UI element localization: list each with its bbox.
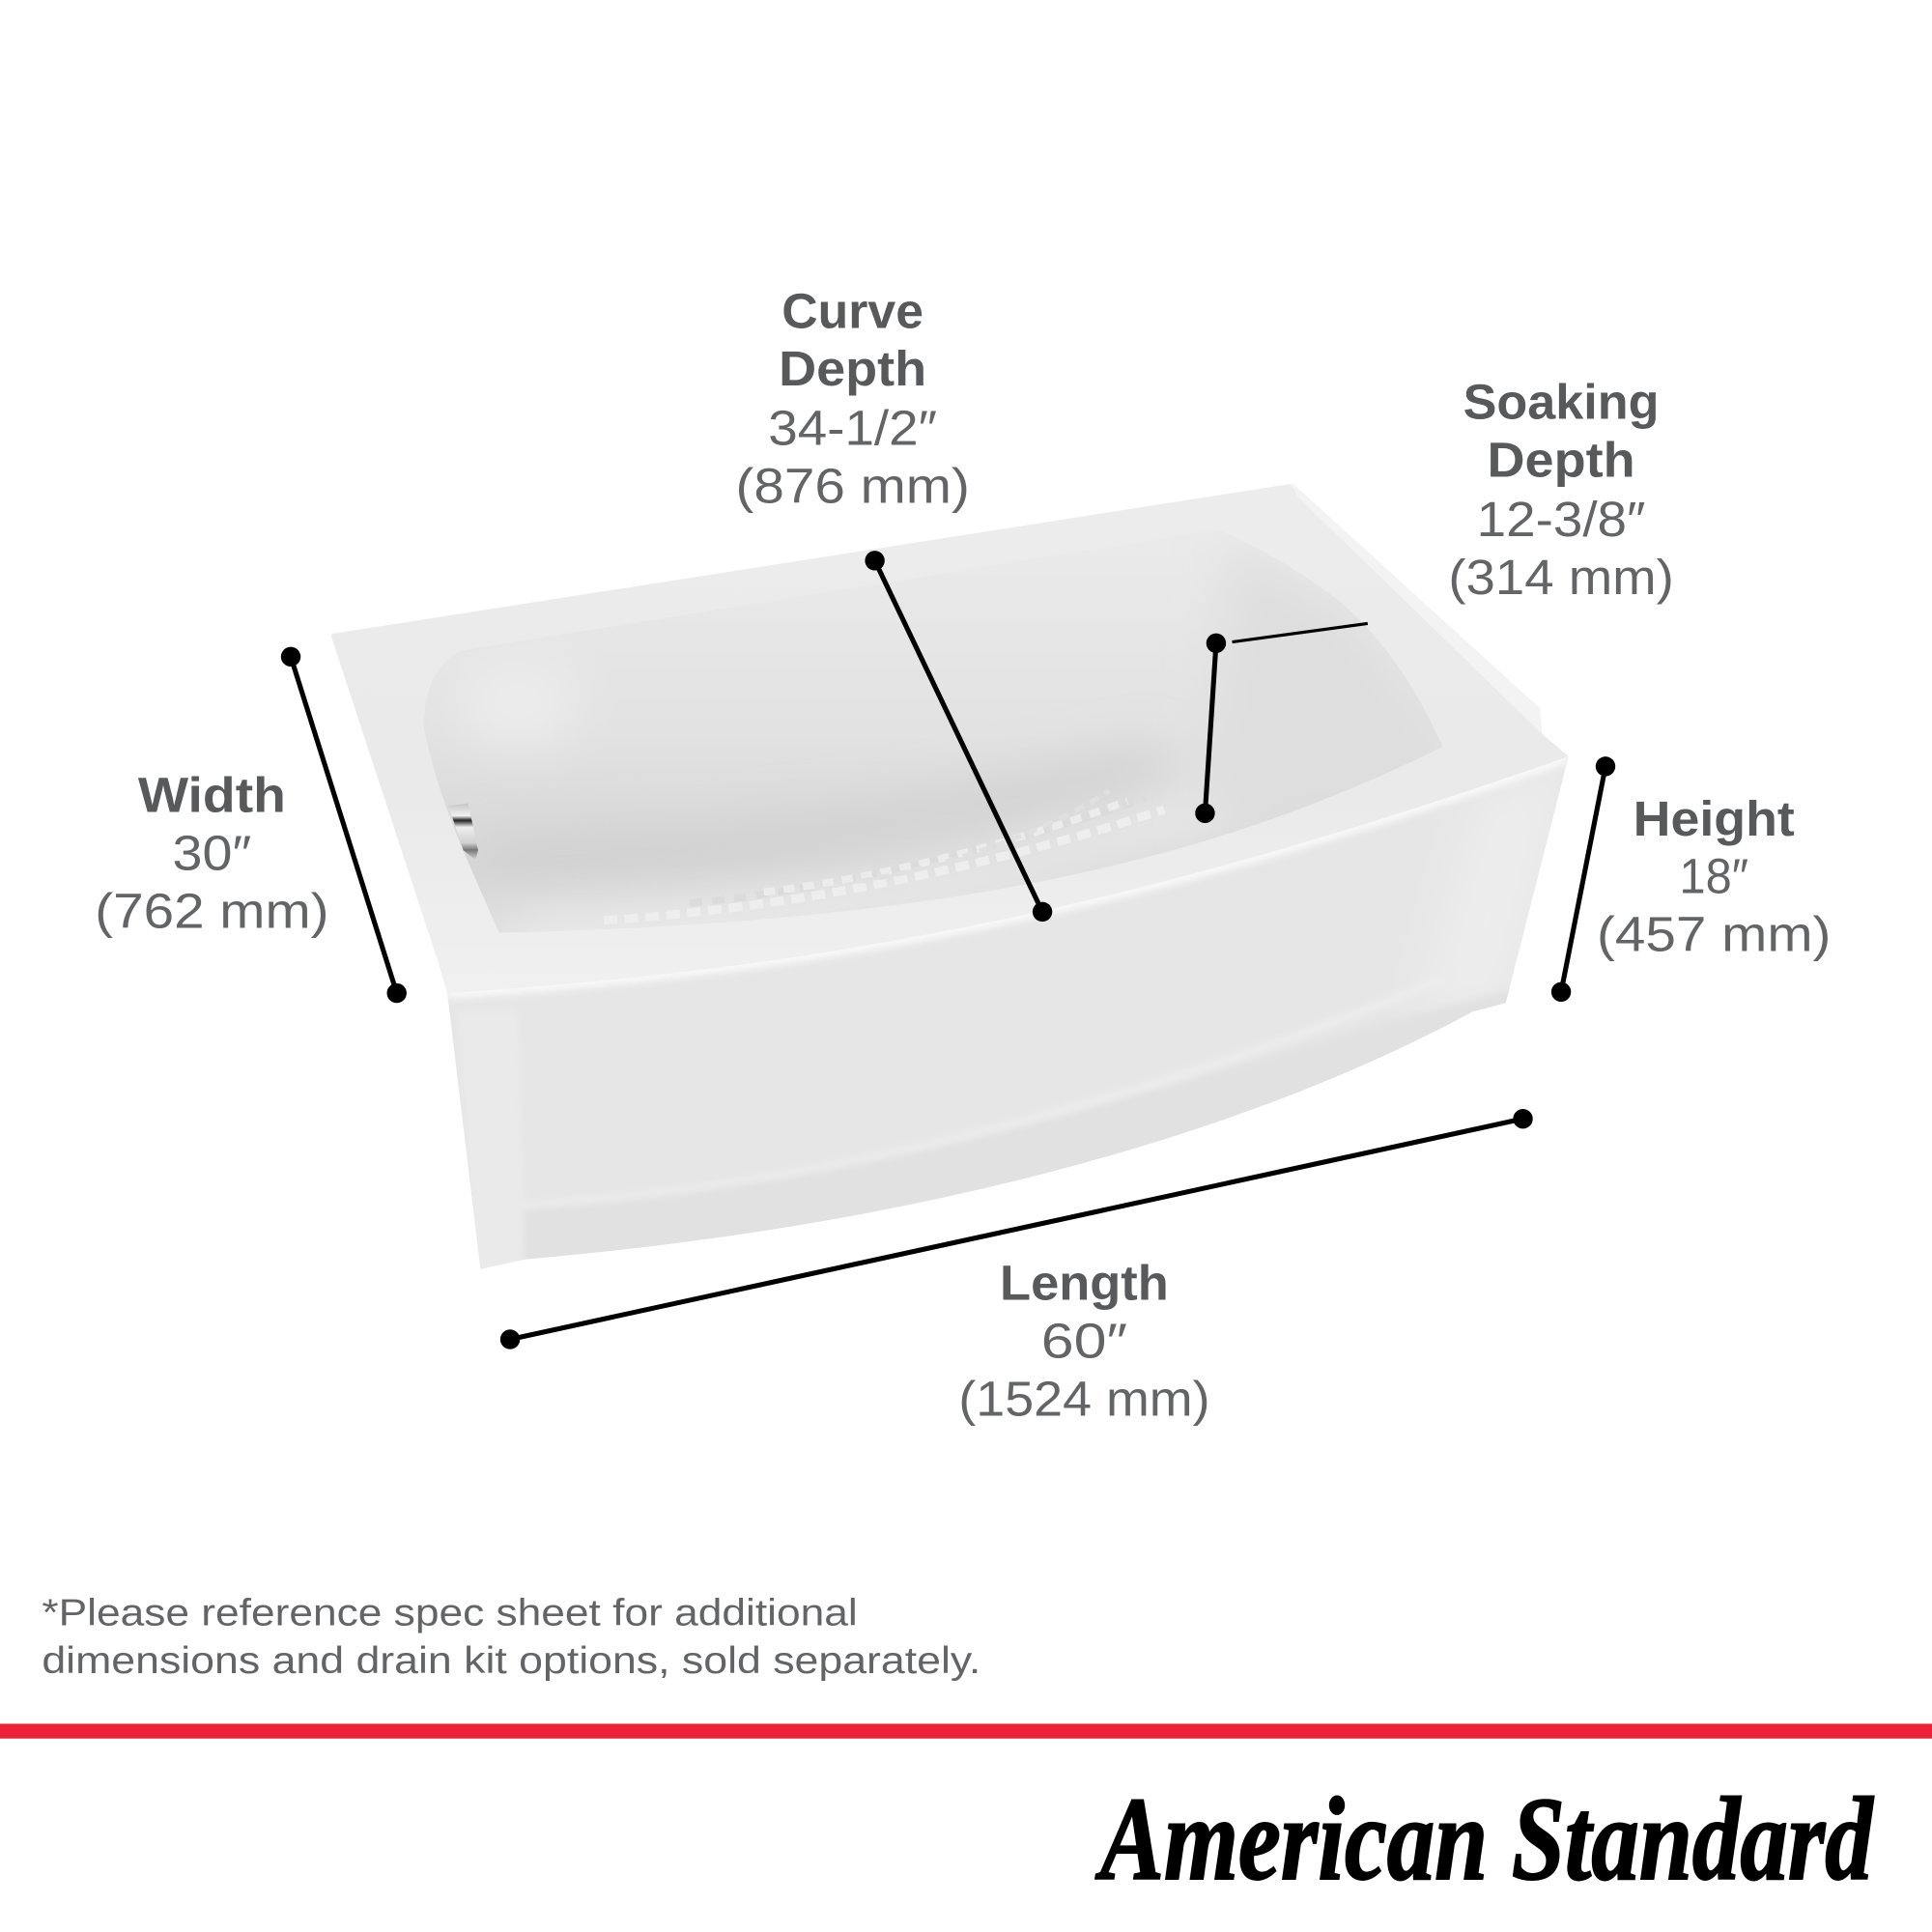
bath mat texture	[604, 791, 1164, 921]
dimension line: soaking depth	[1195, 623, 1368, 823]
label: soaking depth: Depth	[1488, 433, 1635, 488]
label: curve depth	[735, 283, 970, 513]
label: soaking depth	[1448, 375, 1674, 605]
label: soaking depth: 12-3/8″	[1477, 492, 1645, 547]
dimension line: width	[281, 647, 407, 1003]
label: length	[958, 1256, 1210, 1427]
label: length: (1524 mm)	[958, 1372, 1210, 1427]
footnote: *Please reference spec sheet for additional	[42, 1592, 858, 1634]
illustration: white curved bathtub	[331, 484, 1577, 1293]
label: height: Height	[1634, 791, 1795, 846]
red divider bar	[0, 1723, 1932, 1739]
basin interior	[424, 562, 1443, 933]
label: curve depth: (876 mm)	[735, 458, 970, 513]
dimension line: curve depth	[865, 551, 1052, 922]
dimension line: height	[1551, 756, 1615, 1002]
label: width: Width	[138, 768, 286, 823]
dimension line: length	[500, 1109, 1533, 1350]
label: height: (457 mm)	[1597, 907, 1831, 962]
overflow drain	[448, 804, 478, 860]
label: curve depth: Depth	[779, 341, 926, 396]
label: length: 60″	[1041, 1314, 1127, 1369]
label: height: 18″	[1680, 849, 1748, 904]
label: width	[95, 768, 329, 938]
label: curve depth: Curve	[781, 283, 923, 338]
rim top surface	[331, 484, 1569, 993]
label: height	[1597, 791, 1831, 962]
front apron panel	[438, 739, 1577, 1293]
label: width: 30″	[173, 826, 251, 881]
footnote	[42, 1592, 980, 1682]
label: length: Length	[1000, 1256, 1169, 1311]
footnote: dimensions and drain kit options, sold separately.	[42, 1640, 980, 1682]
label: soaking depth: Soaking	[1463, 375, 1659, 430]
right rear flange	[1287, 484, 1543, 739]
label: width: (762 mm)	[95, 883, 329, 938]
label: soaking depth: (314 mm)	[1448, 550, 1674, 605]
label: curve depth: 34-1/2″	[768, 400, 937, 455]
